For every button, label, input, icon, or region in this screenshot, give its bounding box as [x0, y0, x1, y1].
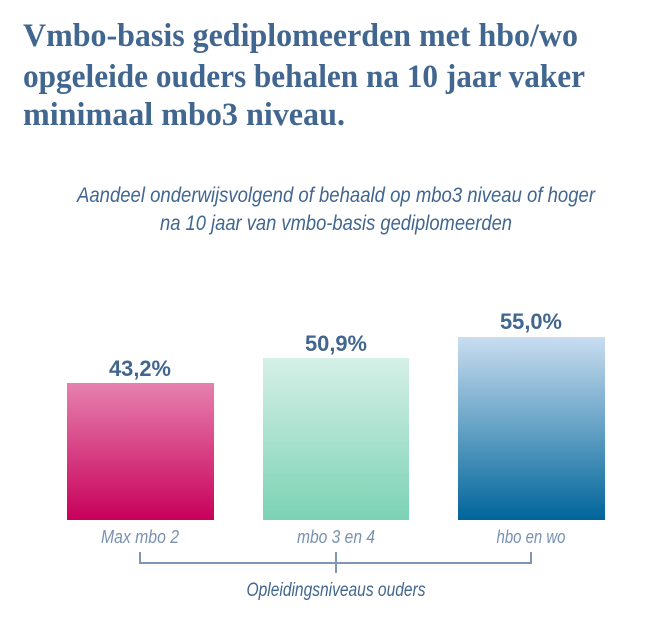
- value: 43,2%: 43,2%: [109, 356, 171, 381]
- category label: mbo 3 en 4: mbo 3 en 4: [297, 527, 375, 547]
- bar: Max mbo 2: [67, 383, 214, 520]
- title: opgeleide ouders behalen na 10 jaar vaker: [23, 59, 585, 95]
- bar chart: [67, 309, 605, 547]
- bar: hbo en wo: [458, 337, 605, 520]
- title: [23, 18, 585, 133]
- category label: Max mbo 2: Max mbo 2: [101, 527, 179, 547]
- category label: hbo en wo: hbo en wo: [496, 527, 566, 547]
- chart subtitle: [75, 184, 596, 235]
- title: minimaal mbo3 niveau.: [23, 97, 345, 133]
- axis title: Opleidingsniveaus ouders: [246, 580, 426, 601]
- chart subtitle: Aandeel onderwijsvolgend of behaald op mbo3 niveau of hoger: [75, 184, 596, 207]
- title: Vmbo-basis gediplomeerden met hbo/wo: [23, 18, 578, 54]
- bar: mbo 3 en 4: [263, 358, 409, 520]
- axis bracket: [140, 552, 531, 573]
- value: 50,9%: 50,9%: [305, 331, 367, 356]
- chart subtitle: na 10 jaar van vmbo-basis gediplomeerden: [160, 212, 512, 235]
- value: 55,0%: 55,0%: [500, 309, 562, 334]
